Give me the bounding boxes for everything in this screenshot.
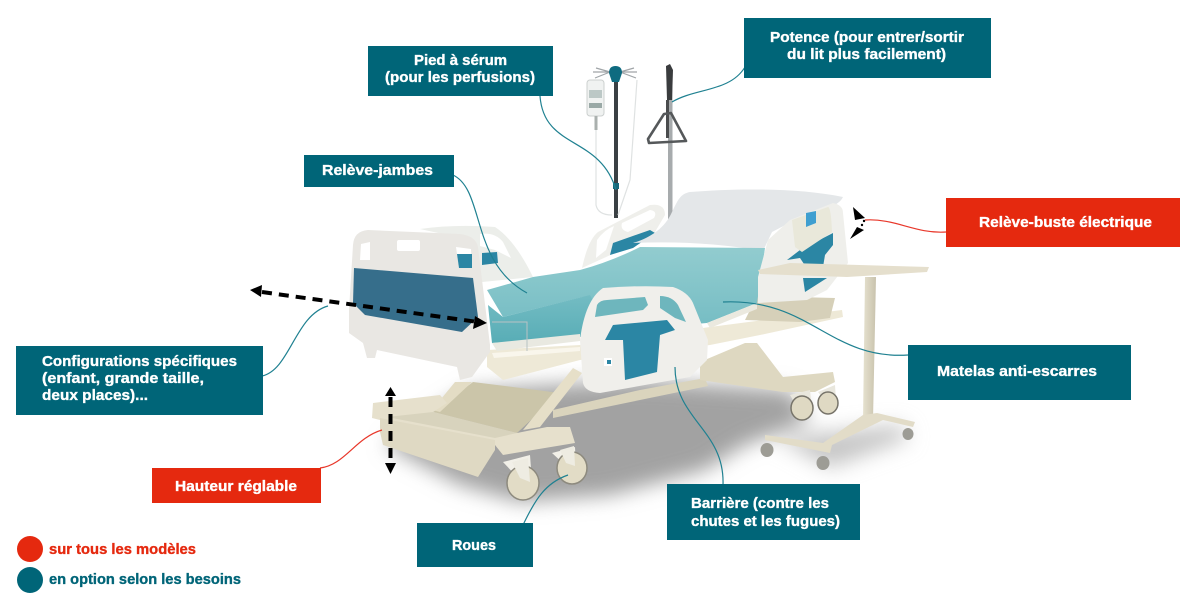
label: potence: [744, 18, 991, 78]
label: configurations spécifiques: deux places)...: [42, 388, 148, 404]
label: barrière: [667, 484, 860, 540]
legend: on all models: [17, 536, 196, 562]
label: potence: Potence (pour entrer/sortir: [770, 30, 964, 46]
leader line: pied à sérum: [540, 96, 616, 190]
leader line: roues: [523, 475, 568, 525]
label: roues: [417, 523, 533, 567]
arrow: backrest tilt: [850, 207, 865, 239]
label: pied à sérum: (pour les perfusions): [385, 70, 535, 86]
label: hauteur réglable: Hauteur réglable: [175, 479, 297, 495]
arrow: vertical dashed: [385, 387, 396, 474]
label: configurations spécifiques: Configurations spécifiques: [42, 354, 237, 370]
label: configurations spécifiques: (enfant, grande taille,: [42, 371, 204, 387]
legend: optional: en option selon les besoins: [49, 572, 241, 588]
legend: on all models: sur tous les modèles: [49, 542, 196, 558]
IV pole: [587, 66, 637, 218]
legend: optional: [17, 567, 241, 593]
leader line: barrière: [675, 367, 723, 485]
bed frame: [487, 296, 843, 380]
label: configurations spécifiques: [16, 346, 263, 415]
back foot board: [420, 226, 533, 282]
leader line: configurations: [262, 306, 328, 376]
label: matelas anti-escarres: [908, 345, 1131, 400]
floor shadow: [385, 380, 910, 502]
label: barrière: Barrière (contre les: [691, 496, 829, 512]
label: pied à sérum: [368, 46, 553, 96]
bed illustration: [349, 64, 929, 502]
label: relève-buste électrique: Relève-buste électrique: [979, 215, 1152, 231]
front side barrier: [580, 286, 708, 393]
leader line: hauteur réglable: [320, 430, 382, 468]
leader line: matelas: [723, 302, 908, 355]
over-bed table: [758, 263, 929, 470]
head board with control panel: [758, 203, 848, 303]
label: matelas anti-escarres: Matelas anti-escarres: [937, 364, 1097, 380]
mattress: [487, 247, 765, 351]
label: relève-jambes: Relève-jambes: [322, 163, 433, 179]
leader line: potence: [672, 67, 745, 102]
leader line: relève-jambes: [453, 175, 527, 293]
label: pied à sérum: Pied à sérum: [414, 53, 507, 69]
label: relève-buste électrique: [946, 198, 1180, 247]
trapeze pole: [648, 64, 686, 220]
label: roues: Roues: [452, 538, 496, 554]
label: barrière: chutes et les fugues): [691, 514, 840, 530]
wheels: [503, 446, 587, 500]
arrow: horizontal dashed: [250, 285, 487, 329]
back side barrier: [582, 205, 665, 268]
scissor lift and base: [372, 343, 838, 500]
leader line: relève-buste: [865, 220, 946, 232]
label: hauteur réglable: [152, 468, 321, 503]
foot board: [349, 230, 490, 380]
label: relève-jambes: [304, 155, 454, 187]
label: potence: du lit plus facilement): [787, 47, 946, 63]
pillow: [633, 189, 843, 251]
